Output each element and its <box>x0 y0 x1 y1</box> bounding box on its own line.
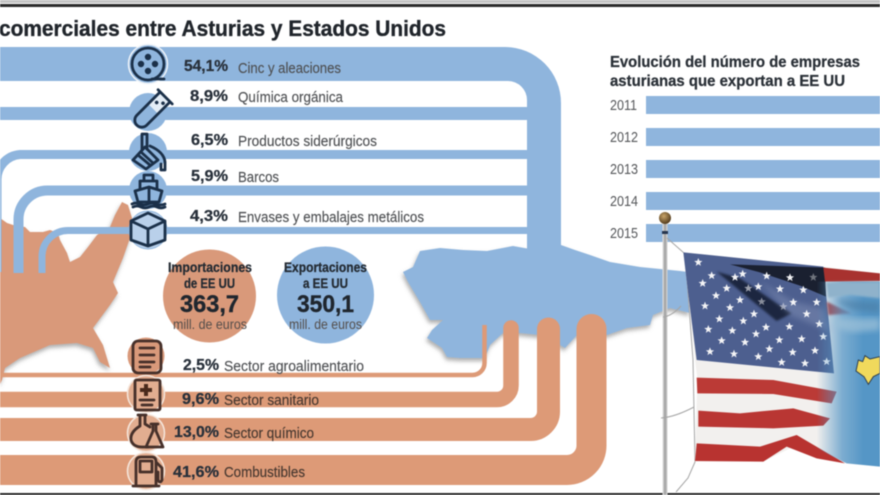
total imports circle: de EE UU <box>184 276 235 291</box>
total exports circle: a EE UU <box>303 276 348 291</box>
export items list: Cinc y aleaciones <box>238 61 341 77</box>
bar chart: exporting companies by year: 2015 <box>610 226 638 242</box>
bar chart: exporting companies by year <box>610 96 880 242</box>
import items list: 13,0% <box>174 424 219 441</box>
total imports circle: 363,7 <box>180 291 239 318</box>
export items list: 6,5% <box>191 132 228 149</box>
total exports circle: Exportaciones <box>284 260 367 275</box>
bar chart: exporting companies by year: 2012 <box>610 130 638 146</box>
export items list: 54,1% <box>184 58 228 75</box>
icon: zinc coil <box>128 44 168 84</box>
import items list: Sector químico <box>224 426 314 442</box>
total imports circle: Importaciones <box>168 260 252 275</box>
import items list: Sector sanitario <box>224 393 319 409</box>
icon: ship <box>129 171 167 209</box>
import items list: 9,6% <box>182 391 219 408</box>
map: Asturias <box>403 245 690 358</box>
flagpole <box>659 212 695 495</box>
map: United States <box>0 202 132 384</box>
total exports circle: 350,1 <box>297 291 354 318</box>
import items list: 2,5% <box>183 357 219 374</box>
icon: food notebook <box>128 338 164 374</box>
icon: steel products <box>129 133 167 171</box>
import items list: 41,6% <box>173 464 219 481</box>
total exports circle: mill. de euros <box>289 317 362 332</box>
export items list <box>184 58 424 226</box>
import items list: Combustibles <box>224 465 305 481</box>
import items list <box>173 357 364 481</box>
export items list: Envases y embalajes metálicos <box>238 210 424 226</box>
total exports circle <box>277 246 374 344</box>
icon: fuel pump <box>128 452 164 490</box>
import items list: Sector agroalimentario <box>224 359 364 375</box>
chart heading <box>610 54 860 90</box>
export items list: 5,9% <box>191 168 228 185</box>
title: comerciales entre Asturias y Estados Unidos <box>0 16 446 41</box>
export items list: 4,3% <box>190 208 228 225</box>
chart heading: asturianas que exportan a EE UU <box>610 73 845 90</box>
export flows: blue bands <box>0 47 561 273</box>
export items list: 8,9% <box>190 88 228 105</box>
icon: test tube <box>129 90 172 132</box>
flag: United States blending into Asturias <box>683 252 880 467</box>
icon: metal packaging box <box>129 211 167 249</box>
export items list: Productos siderúrgicos <box>238 134 377 150</box>
export items list: Química orgánica <box>238 90 344 106</box>
chart heading: Evolución del número de empresas <box>610 54 860 71</box>
bar chart: exporting companies by year: 2013 <box>610 162 638 178</box>
icon: chemistry flasks <box>128 414 164 452</box>
icon: medical book <box>128 376 164 412</box>
import flows: orange bands <box>0 325 592 470</box>
total imports circle <box>163 250 256 342</box>
bar chart: exporting companies by year: 2014 <box>610 194 638 210</box>
export items list: Barcos <box>238 170 279 186</box>
bar chart: exporting companies by year: 2011 <box>610 98 637 114</box>
total imports circle: mill. de euros <box>173 317 247 332</box>
